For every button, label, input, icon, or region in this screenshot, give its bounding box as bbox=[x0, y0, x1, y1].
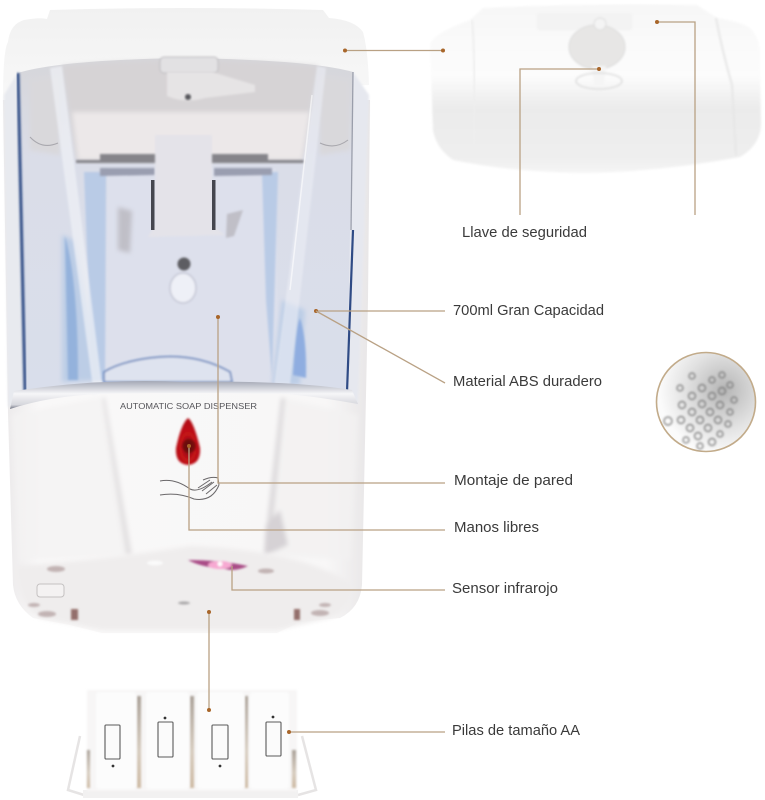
soap level curve bbox=[104, 357, 232, 382]
soap window bbox=[10, 57, 358, 409]
leader: AA batteries bbox=[287, 730, 445, 734]
leader: infrared sensor bbox=[232, 566, 445, 590]
leader: wall mount bbox=[216, 315, 445, 483]
outer glass side strips bbox=[4, 72, 369, 408]
front panel shading bbox=[12, 398, 358, 560]
dispenser body lower housing bbox=[3, 100, 370, 633]
battery holder bbox=[68, 690, 316, 798]
label: security key: Llave de seguridad bbox=[462, 225, 587, 241]
side clips bbox=[68, 736, 316, 795]
clear ribs bbox=[50, 66, 102, 396]
hook plate bbox=[148, 135, 225, 237]
blue streaks bbox=[84, 172, 278, 380]
leader lines bbox=[187, 20, 695, 734]
dispenser lid bbox=[3, 8, 369, 100]
dark window edges bbox=[18, 73, 25, 392]
leader: battery compartment bbox=[207, 610, 211, 712]
keyhole mount bbox=[170, 258, 196, 303]
leader: ABS material bbox=[316, 311, 445, 383]
label: capacity: 700ml Gran Capacidad bbox=[453, 303, 604, 319]
bottom ledge bbox=[16, 546, 352, 630]
label: material: Material ABS duradero bbox=[453, 374, 602, 390]
back panel bbox=[104, 168, 280, 385]
leader: lid top bbox=[655, 20, 695, 215]
leader: hands free bbox=[187, 444, 445, 530]
battery polarity dots bbox=[112, 716, 274, 767]
hook slots bbox=[151, 180, 154, 230]
label: AA batteries: Pilas de tamaño AA bbox=[452, 723, 580, 739]
chrome trim bbox=[10, 381, 358, 409]
leader: capacity bbox=[314, 309, 445, 313]
window corners bbox=[30, 137, 348, 146]
dispenser main unit bbox=[3, 8, 370, 633]
label: wall mount: Montaje de pared bbox=[454, 473, 573, 489]
material sample circle bbox=[656, 352, 756, 452]
icon: red drop LED bbox=[176, 418, 200, 465]
battery icons bbox=[105, 722, 281, 759]
rail bar bbox=[76, 154, 304, 163]
icon: hand bbox=[160, 477, 219, 499]
holder base bbox=[83, 790, 298, 798]
bubbles bbox=[664, 372, 737, 449]
holder tray bbox=[87, 690, 297, 791]
leader: security key bbox=[520, 67, 601, 215]
mounting holes bbox=[28, 560, 331, 620]
lid shell bbox=[430, 4, 761, 173]
interior top shadow bbox=[62, 60, 318, 160]
label: hands free: Manos libres bbox=[454, 520, 539, 536]
cylinder separators bbox=[87, 696, 296, 788]
security key bbox=[569, 18, 625, 89]
label: infrared sensor: Sensor infrarojo bbox=[452, 581, 558, 597]
panel grooves bbox=[118, 207, 132, 253]
leader: lid bbox=[343, 48, 445, 52]
cylinders bbox=[96, 692, 289, 789]
infrared sensor bbox=[188, 560, 248, 570]
lower blue tint bbox=[62, 235, 305, 385]
product name: AUTOMATIC SOAP DISPENSER bbox=[120, 402, 257, 411]
pump mechanism bbox=[160, 57, 255, 101]
security lid detail bbox=[430, 4, 761, 173]
lid side creases bbox=[716, 18, 736, 155]
lid top panel shade bbox=[537, 13, 632, 30]
